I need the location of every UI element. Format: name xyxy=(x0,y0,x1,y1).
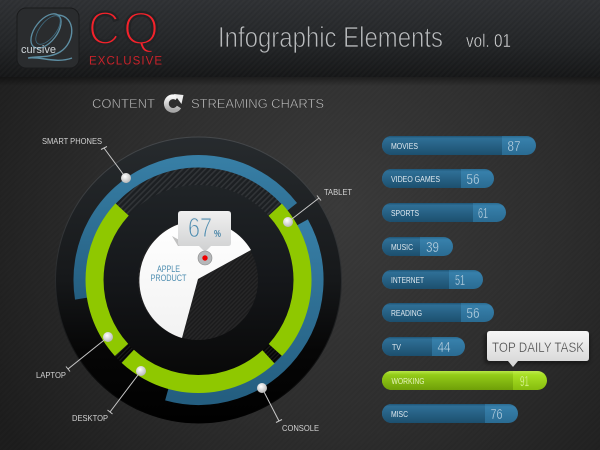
callout line: tablet: TABLET xyxy=(324,187,352,197)
white pie slice xyxy=(139,221,251,338)
bar: internet: 51 xyxy=(455,272,465,289)
bar: tv xyxy=(382,337,465,356)
title: Infographic Elements xyxy=(218,22,443,54)
bar: movies: 87 xyxy=(508,138,520,155)
callout line: desktop xyxy=(72,366,146,423)
bar: reading: 56 xyxy=(466,305,480,322)
blue ring segment: smart phones xyxy=(80,161,292,299)
bar: tv: 44 xyxy=(438,339,450,356)
callout: 67% xyxy=(172,211,231,252)
callout: top daily task xyxy=(484,331,590,367)
donut chart xyxy=(56,137,342,423)
red pin xyxy=(198,251,212,265)
bar: video games: 56 xyxy=(466,171,480,188)
bar: video games xyxy=(382,169,494,188)
bar: video games: VIDEO GAMES xyxy=(391,175,440,184)
callout: 67%: 67 xyxy=(188,212,212,243)
CQ exclusive brand xyxy=(88,2,162,68)
subheading: content streaming charts xyxy=(92,94,324,111)
hatched gap: lower left xyxy=(122,350,128,356)
CQ exclusive brand: EXCLUSIVE xyxy=(89,56,162,68)
bar: tv: TV xyxy=(392,343,402,352)
callout: top daily task: TOP DAILY TASK xyxy=(492,339,585,355)
green ring segment: desktop xyxy=(128,356,268,384)
subheading: content streaming charts: STREAMING CHARTS xyxy=(191,96,324,111)
bar: sports: 61 xyxy=(478,205,488,222)
bar: sports: SPORTS xyxy=(391,209,419,218)
hatched center disc xyxy=(138,220,258,340)
volume label: vol. 01 xyxy=(466,31,511,51)
callout line: laptop: LAPTOP xyxy=(36,370,66,380)
subheading: content streaming charts: CONTENT xyxy=(92,96,155,111)
bar: internet: INTERNET xyxy=(391,276,424,285)
bar: working (highlighted): 91 xyxy=(520,373,529,390)
bar: working (highlighted): WORKING xyxy=(392,377,424,386)
bar: misc xyxy=(382,404,518,423)
pie label: APPLE xyxy=(157,264,180,274)
bar: reading xyxy=(382,303,494,322)
bar: music xyxy=(382,237,453,256)
callout line: smart phones: SMART PHONES xyxy=(42,136,102,146)
CQ exclusive brand: C xyxy=(88,2,120,54)
callout line: laptop xyxy=(36,332,113,380)
callout line: tablet xyxy=(283,187,352,227)
bar: misc: 76 xyxy=(490,406,502,423)
callout line: console: CONSOLE xyxy=(282,423,319,433)
logo: cursive Q xyxy=(17,8,79,68)
green ring segment: tablet xyxy=(275,210,303,350)
header band xyxy=(0,0,600,86)
bar: working (highlighted) xyxy=(382,371,547,390)
bar: reading: READING xyxy=(391,309,422,318)
outer dark disc xyxy=(56,137,342,423)
bar: internet xyxy=(382,270,483,289)
callout line: console xyxy=(257,383,319,433)
callout line: desktop: DESKTOP xyxy=(72,413,108,423)
bar: movies xyxy=(382,136,536,155)
icon: refresh arrow xyxy=(166,94,184,110)
bar: misc: MISC xyxy=(391,410,408,419)
hatched empty track xyxy=(122,176,275,210)
bar: music: MUSIC xyxy=(391,243,413,252)
logo: cursive Q: cursive xyxy=(21,44,56,56)
callout: 67%: % xyxy=(214,229,221,240)
inner disc xyxy=(104,185,294,375)
donut chart: PRODUCT xyxy=(150,273,187,283)
bar: movies: MOVIES xyxy=(391,142,418,151)
callout line: smart phones xyxy=(42,136,131,183)
CQ exclusive brand: Q xyxy=(123,2,159,54)
hatched gap: lower right xyxy=(268,350,275,357)
bar: music: 39 xyxy=(426,239,439,256)
bar: sports xyxy=(382,203,506,222)
blue ring segment: console xyxy=(167,222,317,399)
green ring segment: laptop xyxy=(95,210,122,350)
